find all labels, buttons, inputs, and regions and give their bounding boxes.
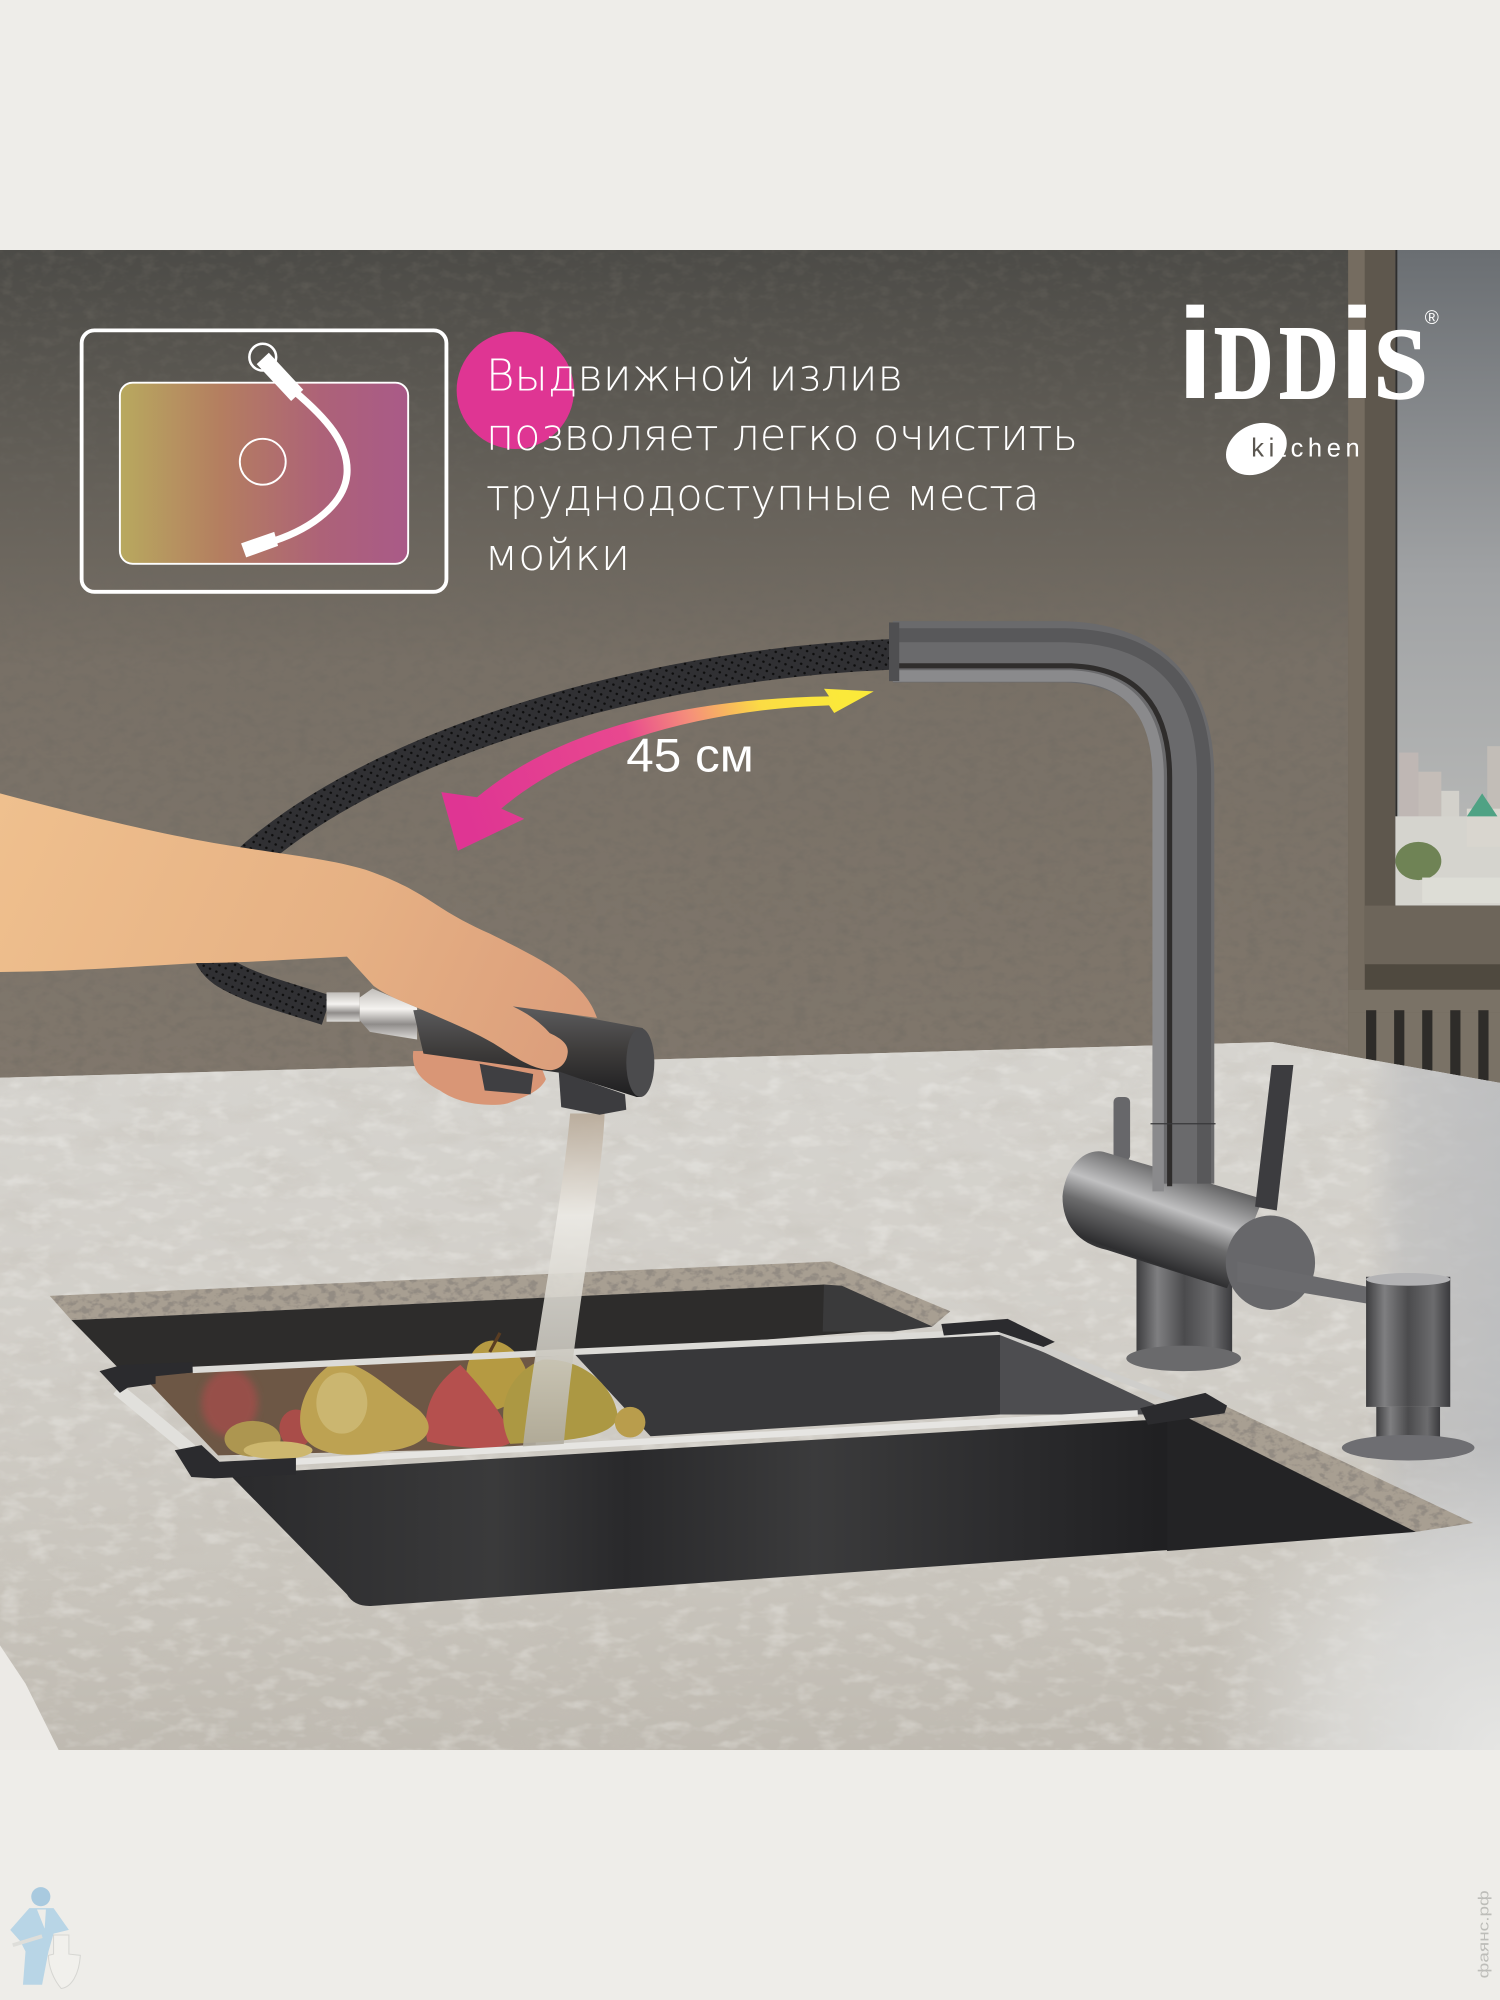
arrow length label: 45 см bbox=[626, 730, 754, 783]
main description text: труднодоступные места bbox=[486, 471, 1040, 521]
fingers under the spray head bbox=[413, 1051, 546, 1105]
back pear bbox=[466, 1341, 529, 1409]
right lever bbox=[1255, 1065, 1293, 1210]
chrome connector bbox=[327, 989, 417, 1040]
far right small pear bbox=[615, 1407, 645, 1438]
faucet bbox=[889, 622, 1315, 1371]
sink diagram icon bbox=[82, 330, 446, 592]
colander back wall bbox=[574, 1330, 1000, 1436]
colander right wall bbox=[1000, 1332, 1176, 1415]
IDDIS logo: S bbox=[1374, 307, 1428, 421]
corner clips bbox=[99, 1319, 1227, 1478]
IDDIS logo: D bbox=[1279, 305, 1338, 421]
sink bbox=[38, 1256, 1480, 1606]
mascot toilet bbox=[48, 1935, 80, 1989]
marble countertop bbox=[0, 1033, 1500, 1750]
sink stone rim bbox=[38, 1256, 1480, 1543]
mascot head bbox=[31, 1887, 50, 1906]
small left pears bbox=[224, 1421, 281, 1457]
colander left reflection bbox=[143, 1352, 536, 1455]
icon drain bbox=[240, 439, 286, 485]
right pear bbox=[503, 1360, 617, 1444]
faucet mixer barrel bbox=[1062, 1151, 1263, 1288]
IDDIS logo bbox=[1177, 282, 1439, 426]
IDDIS logo: ® bbox=[1425, 308, 1439, 329]
IDDIS logo: i bbox=[1339, 282, 1375, 426]
radiator bbox=[1348, 1010, 1500, 1082]
IDDIS logo: D bbox=[1214, 305, 1273, 421]
main description text: позволяет легко очистить bbox=[486, 411, 1078, 461]
far bowl bbox=[71, 1284, 932, 1384]
icon hose bbox=[274, 390, 347, 541]
IDDIS logo: i bbox=[1177, 282, 1213, 426]
main description text bbox=[485, 351, 1078, 581]
main description text: мойки bbox=[485, 531, 630, 581]
collar line bbox=[1151, 1123, 1216, 1125]
water stream bbox=[523, 1114, 605, 1446]
mascot wrench bbox=[13, 1936, 42, 1945]
faucet flange bbox=[1126, 1346, 1241, 1371]
hand with thumb bbox=[0, 793, 597, 1070]
soap dispenser bbox=[1237, 1261, 1474, 1460]
faucet spout tube bbox=[893, 635, 1204, 1191]
icon spray end bbox=[241, 532, 278, 557]
spout head cuff bbox=[889, 622, 899, 681]
pink pear bbox=[426, 1365, 511, 1448]
mixer disc bbox=[1226, 1216, 1315, 1310]
watermark vertical label: фаянс.рф bbox=[1477, 1890, 1493, 1978]
movement arrow bbox=[441, 689, 874, 851]
window with city view bbox=[1348, 250, 1500, 1092]
faucet post bbox=[1136, 1237, 1232, 1352]
wall background bbox=[0, 250, 1500, 1094]
mascot shirt bbox=[37, 1909, 46, 1929]
right bowl interior bbox=[1167, 1415, 1416, 1551]
rails bbox=[117, 1332, 1176, 1462]
main description text: Выдвижной излив bbox=[486, 351, 903, 401]
big yellow pear bbox=[300, 1362, 429, 1455]
pears bbox=[224, 1333, 645, 1459]
watermark plumber mascot bbox=[10, 1887, 80, 1989]
pink accent circle bbox=[457, 332, 574, 449]
kitchen sub-logo: kitchen bbox=[1251, 435, 1360, 463]
icon frame bbox=[82, 330, 446, 592]
icon hose head bbox=[263, 358, 297, 395]
kitchen sub-logo bbox=[1217, 413, 1360, 485]
icon sink basin bbox=[120, 383, 408, 564]
colander front bowl panel bbox=[230, 1418, 1176, 1606]
left lever bbox=[1114, 1097, 1130, 1161]
spray head bbox=[413, 1004, 654, 1115]
icon tap hole bbox=[249, 344, 276, 371]
mascot body bbox=[10, 1908, 69, 1985]
pull-out hose bbox=[205, 654, 893, 1010]
